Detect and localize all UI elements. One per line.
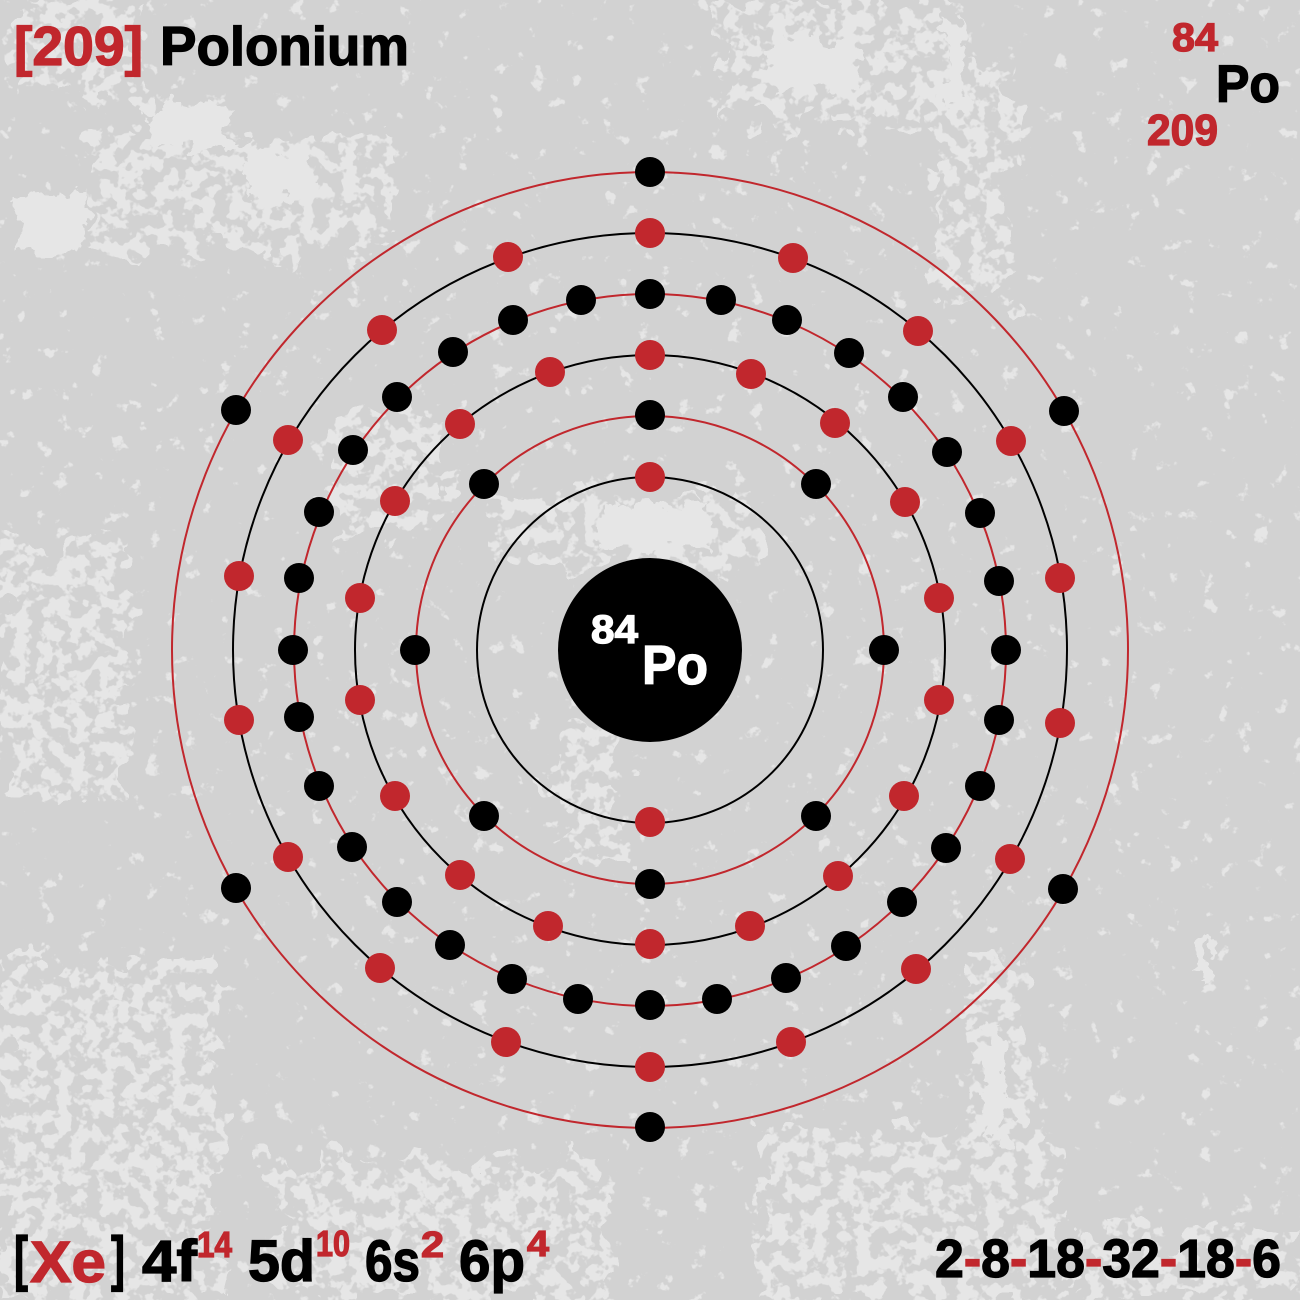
electron configuration: 14	[197, 1224, 232, 1265]
electron configuration: 6s	[365, 1229, 420, 1294]
electron shells	[172, 172, 1128, 1128]
electron configuration: [	[14, 1225, 28, 1292]
nucleus label: 84	[591, 608, 639, 652]
electrons shell 4 (32)	[278, 279, 1021, 1020]
element symbol block: Po	[1216, 55, 1280, 114]
electron configuration: 2	[421, 1224, 444, 1265]
nucleus label: Po	[642, 634, 708, 696]
electron configuration: Xe	[30, 1230, 106, 1295]
electron configuration: 4f	[142, 1229, 198, 1294]
electrons per shell: 2-8-18-32-18-6	[935, 1229, 1281, 1289]
nucleus label	[591, 608, 708, 696]
electron configuration	[14, 1223, 549, 1295]
title	[14, 15, 409, 77]
electrons shell 5 (18)	[224, 218, 1075, 1082]
electron configuration: 4	[527, 1223, 549, 1264]
electron configuration: 5d	[248, 1229, 315, 1294]
element symbol block	[1147, 16, 1280, 155]
electron configuration: 10	[316, 1223, 350, 1264]
title: [209]	[14, 15, 143, 77]
electrons shell 3 (18)	[345, 340, 954, 959]
electrons shell 6 (6)	[221, 157, 1079, 1142]
element symbol block: 84	[1172, 16, 1219, 60]
electron configuration: ]	[111, 1225, 125, 1292]
electrons shell 1 (2)	[635, 462, 665, 837]
nucleus	[558, 558, 742, 742]
atom diagram	[172, 157, 1128, 1142]
title: Polonium	[160, 15, 409, 77]
electrons shell 2 (8)	[400, 400, 899, 899]
electron configuration: 6p	[459, 1229, 525, 1294]
element symbol block: 209	[1147, 106, 1218, 155]
